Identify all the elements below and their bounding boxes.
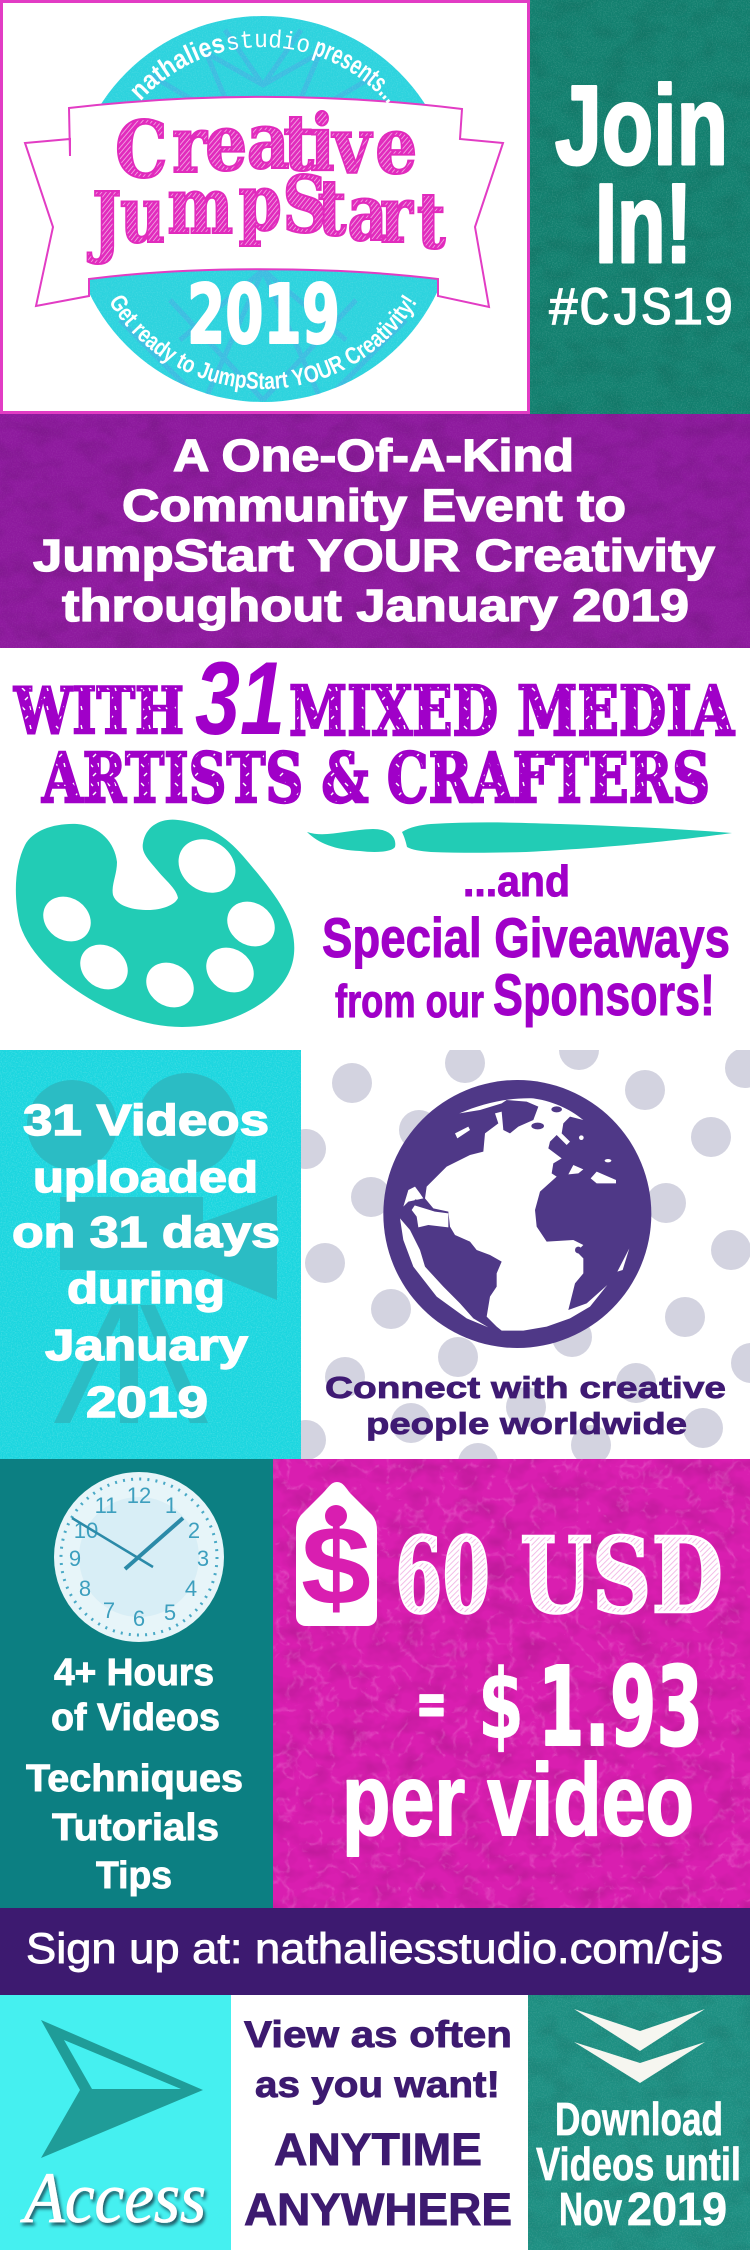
event heading: JumpStart YOUR Creativity xyxy=(33,530,715,581)
title: Creative JumpStart xyxy=(87,96,446,267)
text: hours and topics: of Videos xyxy=(51,1697,220,1739)
panel: price xyxy=(273,1459,750,1908)
panel: view anytime xyxy=(231,1995,528,2250)
icon: arrow xyxy=(41,2020,203,2158)
heading: 31 mixed media artists and crafters xyxy=(13,641,735,819)
event heading: throughout January 2019 xyxy=(62,580,689,631)
text: connect with creative people xyxy=(325,1370,726,1441)
event heading: A One-Of-A-Kind xyxy=(173,430,574,481)
text: download until: Nov xyxy=(559,2183,622,2235)
price per video xyxy=(342,1643,703,1857)
banner ribbon xyxy=(25,97,503,307)
panel: join in xyxy=(530,0,750,414)
panel: videos xyxy=(0,1050,301,1459)
text: hours and topics: 4+ Hours xyxy=(54,1652,214,1694)
polka dots xyxy=(301,1050,750,1459)
text: connect with creative people: people worldwide xyxy=(366,1406,687,1441)
text: and special giveaways from our sponsors xyxy=(322,857,730,1028)
text: hours and topics: Tips xyxy=(96,1855,172,1897)
icon: double chevron xyxy=(574,2009,705,2083)
text: 31 videos: 2019 xyxy=(86,1378,208,1427)
text: view and anytime anywhere: as you want! xyxy=(255,2064,500,2105)
panel: artists and sponsors xyxy=(0,641,750,1050)
text: download until: 2019 xyxy=(627,2183,727,2235)
text: view and anytime anywhere: ANYWHERE xyxy=(244,2184,512,2235)
icon: paint brush xyxy=(307,822,732,853)
icon: clock xyxy=(54,1472,224,1642)
text: hours and topics xyxy=(26,1652,243,1897)
curved text: presenter: nathalies xyxy=(131,38,224,100)
heading: join in: In! xyxy=(595,161,692,286)
icon: clock: 1 xyxy=(165,1493,177,1518)
icon: palette xyxy=(16,820,294,1027)
panel: access xyxy=(0,1995,231,2250)
title: Creative JumpStart: JumpStart xyxy=(87,157,446,267)
title: Creative JumpStart: Creative xyxy=(115,96,417,196)
text: 31 videos: 31 Videos xyxy=(23,1096,269,1145)
text: hours and topics: Techniques xyxy=(26,1758,243,1800)
curved text: tagline: Get ready to JumpStart YOUR Creativity! xyxy=(111,294,416,392)
icon: clock: 11 xyxy=(95,1493,117,1518)
panel: sign up bar xyxy=(0,1908,750,1995)
logo blue circle xyxy=(70,16,456,402)
heading: 31 mixed media artists and crafters: WITH xyxy=(13,674,184,749)
year 2019: 2019 xyxy=(187,268,340,363)
icon: clock: 5 xyxy=(164,1600,176,1625)
icon: globe xyxy=(383,1080,651,1348)
text: connect with creative people: Connect with creative xyxy=(325,1370,726,1405)
icon: film camera xyxy=(27,1073,277,1423)
event heading xyxy=(33,430,715,631)
icon: clock: 4 xyxy=(185,1576,197,1601)
heading: join in xyxy=(555,63,728,286)
sign up url: Sign up at: nathaliesstudio.com/cjs xyxy=(26,1925,723,1973)
text: 31 videos xyxy=(12,1096,280,1427)
heading: 31 mixed media artists and crafters: 31 xyxy=(195,641,285,757)
text: view and anytime anywhere xyxy=(244,2014,512,2235)
icon: price tag: $ xyxy=(301,1503,371,1628)
panel: hours of videos xyxy=(0,1459,273,1908)
icon: clock: 7 xyxy=(103,1598,115,1623)
text: 31 videos: January xyxy=(45,1321,249,1370)
text: and special giveaways from our sponsors: from our xyxy=(335,975,484,1027)
icon: clock: 2 xyxy=(188,1518,200,1543)
price: 60 USD: 60 xyxy=(395,1514,490,1637)
text: view and anytime anywhere: View as often xyxy=(244,2014,512,2055)
curved text: presenter: studio xyxy=(228,30,309,52)
icon: clock: 8 xyxy=(79,1576,91,1601)
heading: 31 mixed media artists and crafters: MIXED xyxy=(289,672,498,752)
icon: clock: 9 xyxy=(69,1546,81,1571)
text: 31 videos: on 31 days xyxy=(12,1208,280,1257)
panel: logo xyxy=(0,0,530,414)
hashtag: #CJS19 xyxy=(548,280,734,341)
icon: price tag xyxy=(296,1482,377,1628)
text: 31 videos: uploaded xyxy=(33,1153,258,1202)
curved text: presenter xyxy=(131,30,390,103)
price per video: $ xyxy=(478,1649,524,1761)
price: 60 USD xyxy=(395,1514,723,1637)
text: 31 videos: during xyxy=(67,1264,225,1313)
panel: connect worldwide xyxy=(301,1050,750,1459)
event heading: Community Event to xyxy=(122,480,626,531)
text: and special giveaways from our sponsors: ...and xyxy=(463,857,570,906)
curved text: presenter: presents... xyxy=(312,41,390,103)
text: view and anytime anywhere: ANYTIME xyxy=(274,2124,482,2175)
icon: clock: 6 xyxy=(133,1606,145,1631)
label: access: Access xyxy=(20,2158,206,2238)
price per video: = xyxy=(416,1669,447,1739)
icon: clock: 12 xyxy=(127,1483,151,1508)
text: download until xyxy=(536,2093,741,2235)
panel: download xyxy=(528,1995,750,2250)
icon: clock: 3 xyxy=(197,1546,209,1571)
icon: clock: 10 xyxy=(74,1518,98,1543)
text: hours and topics: Tutorials xyxy=(52,1807,219,1849)
panel: event banner xyxy=(0,414,750,648)
